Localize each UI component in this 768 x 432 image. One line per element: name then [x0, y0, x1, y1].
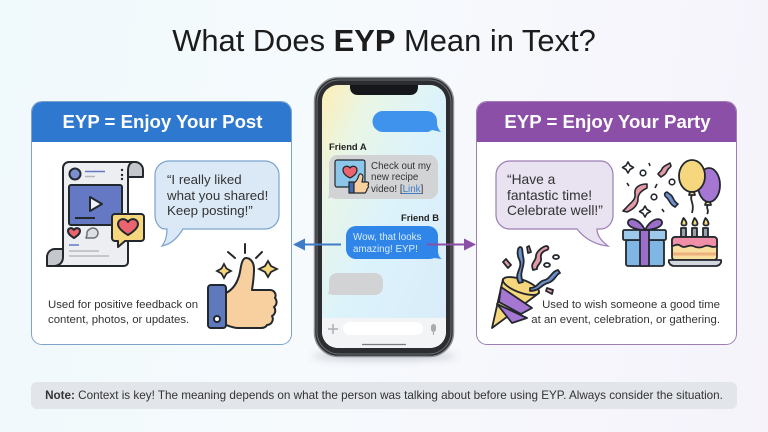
icon: heart speech badge [68, 214, 144, 247]
bubble text: I really liked: “I really liked [167, 172, 242, 187]
phone notch [350, 85, 418, 95]
message: Check out my recipe: Check out my [371, 161, 431, 172]
caption: Enjoy Your Party [531, 299, 720, 326]
grey empty bubble [327, 273, 383, 295]
caption: Enjoy Your Party: at an event, celebration, or gathering. [531, 314, 720, 326]
bubble text: Have a fantastic time: fantastic time! [507, 188, 592, 202]
icon: party popper [492, 246, 560, 328]
caption: Enjoy Your Post: content, photos, or updates. [48, 314, 189, 326]
message: Wow EYP: amazing! EYP! [353, 244, 418, 254]
speech bubble: I really liked [155, 161, 279, 246]
panel: Enjoy Your Post [31, 101, 292, 345]
input bar [322, 318, 446, 348]
message: Check out my recipe [371, 161, 431, 195]
speech bubble: Have a fantastic time [496, 161, 613, 246]
icon: birthday cake [669, 218, 721, 266]
arrow: to Enjoy Your Party [427, 238, 476, 250]
heading: Enjoy Your Party [476, 100, 740, 142]
phone [293, 78, 476, 360]
bubble text: Have a fantastic time [507, 172, 603, 218]
message: Check out my recipe: video! [Link] [371, 184, 423, 195]
icon: balloons [679, 160, 720, 214]
bubble text: Have a fantastic time: Celebrate well!” [507, 203, 603, 218]
note bar [31, 382, 737, 409]
blue message bubble: Friend B [346, 226, 442, 259]
label: Friend A: Friend A [329, 141, 367, 152]
heading: Enjoy Your Post [30, 100, 294, 142]
bubble text: I really liked: what you shared! [167, 188, 268, 202]
heading: Enjoy Your Post: EYP = Enjoy Your Post [63, 110, 262, 132]
blue message bubble, top [373, 111, 441, 132]
message: Wow EYP: Wow, that looks [353, 232, 421, 243]
bubble text: I really liked [167, 172, 268, 218]
title: What Does EYP Mean in Text? [172, 23, 596, 58]
caption: Enjoy Your Party: Used to wish someone a good time [542, 299, 720, 311]
heading: Enjoy Your Party: EYP = Enjoy Your Party [504, 110, 711, 132]
arrow: to Enjoy Your Post [293, 238, 341, 250]
panel: Enjoy Your Party [476, 101, 737, 345]
message: Check out my recipe: new recipe [371, 172, 418, 183]
icon: confetti [622, 162, 678, 217]
icon: gift box [623, 219, 666, 266]
icon: thumbs up [208, 258, 277, 328]
note bar: Note: Context is key! The meaning depends on what the person was talking about before using EYP. Always consider the situation. [45, 389, 723, 402]
grey message bubble [327, 155, 438, 199]
caption: Enjoy Your Post: Used for positive feedback on [48, 299, 198, 311]
caption: Enjoy Your Post [48, 299, 198, 326]
message: Wow EYP [353, 232, 422, 254]
bubble text: Have a fantastic time: “Have a [507, 172, 555, 187]
icon: video heart thumbs [335, 160, 369, 193]
icon: social post scroll [47, 162, 143, 266]
label: Friend B: Friend B [401, 212, 439, 223]
bubble text: I really liked: Keep posting!” [167, 203, 253, 218]
